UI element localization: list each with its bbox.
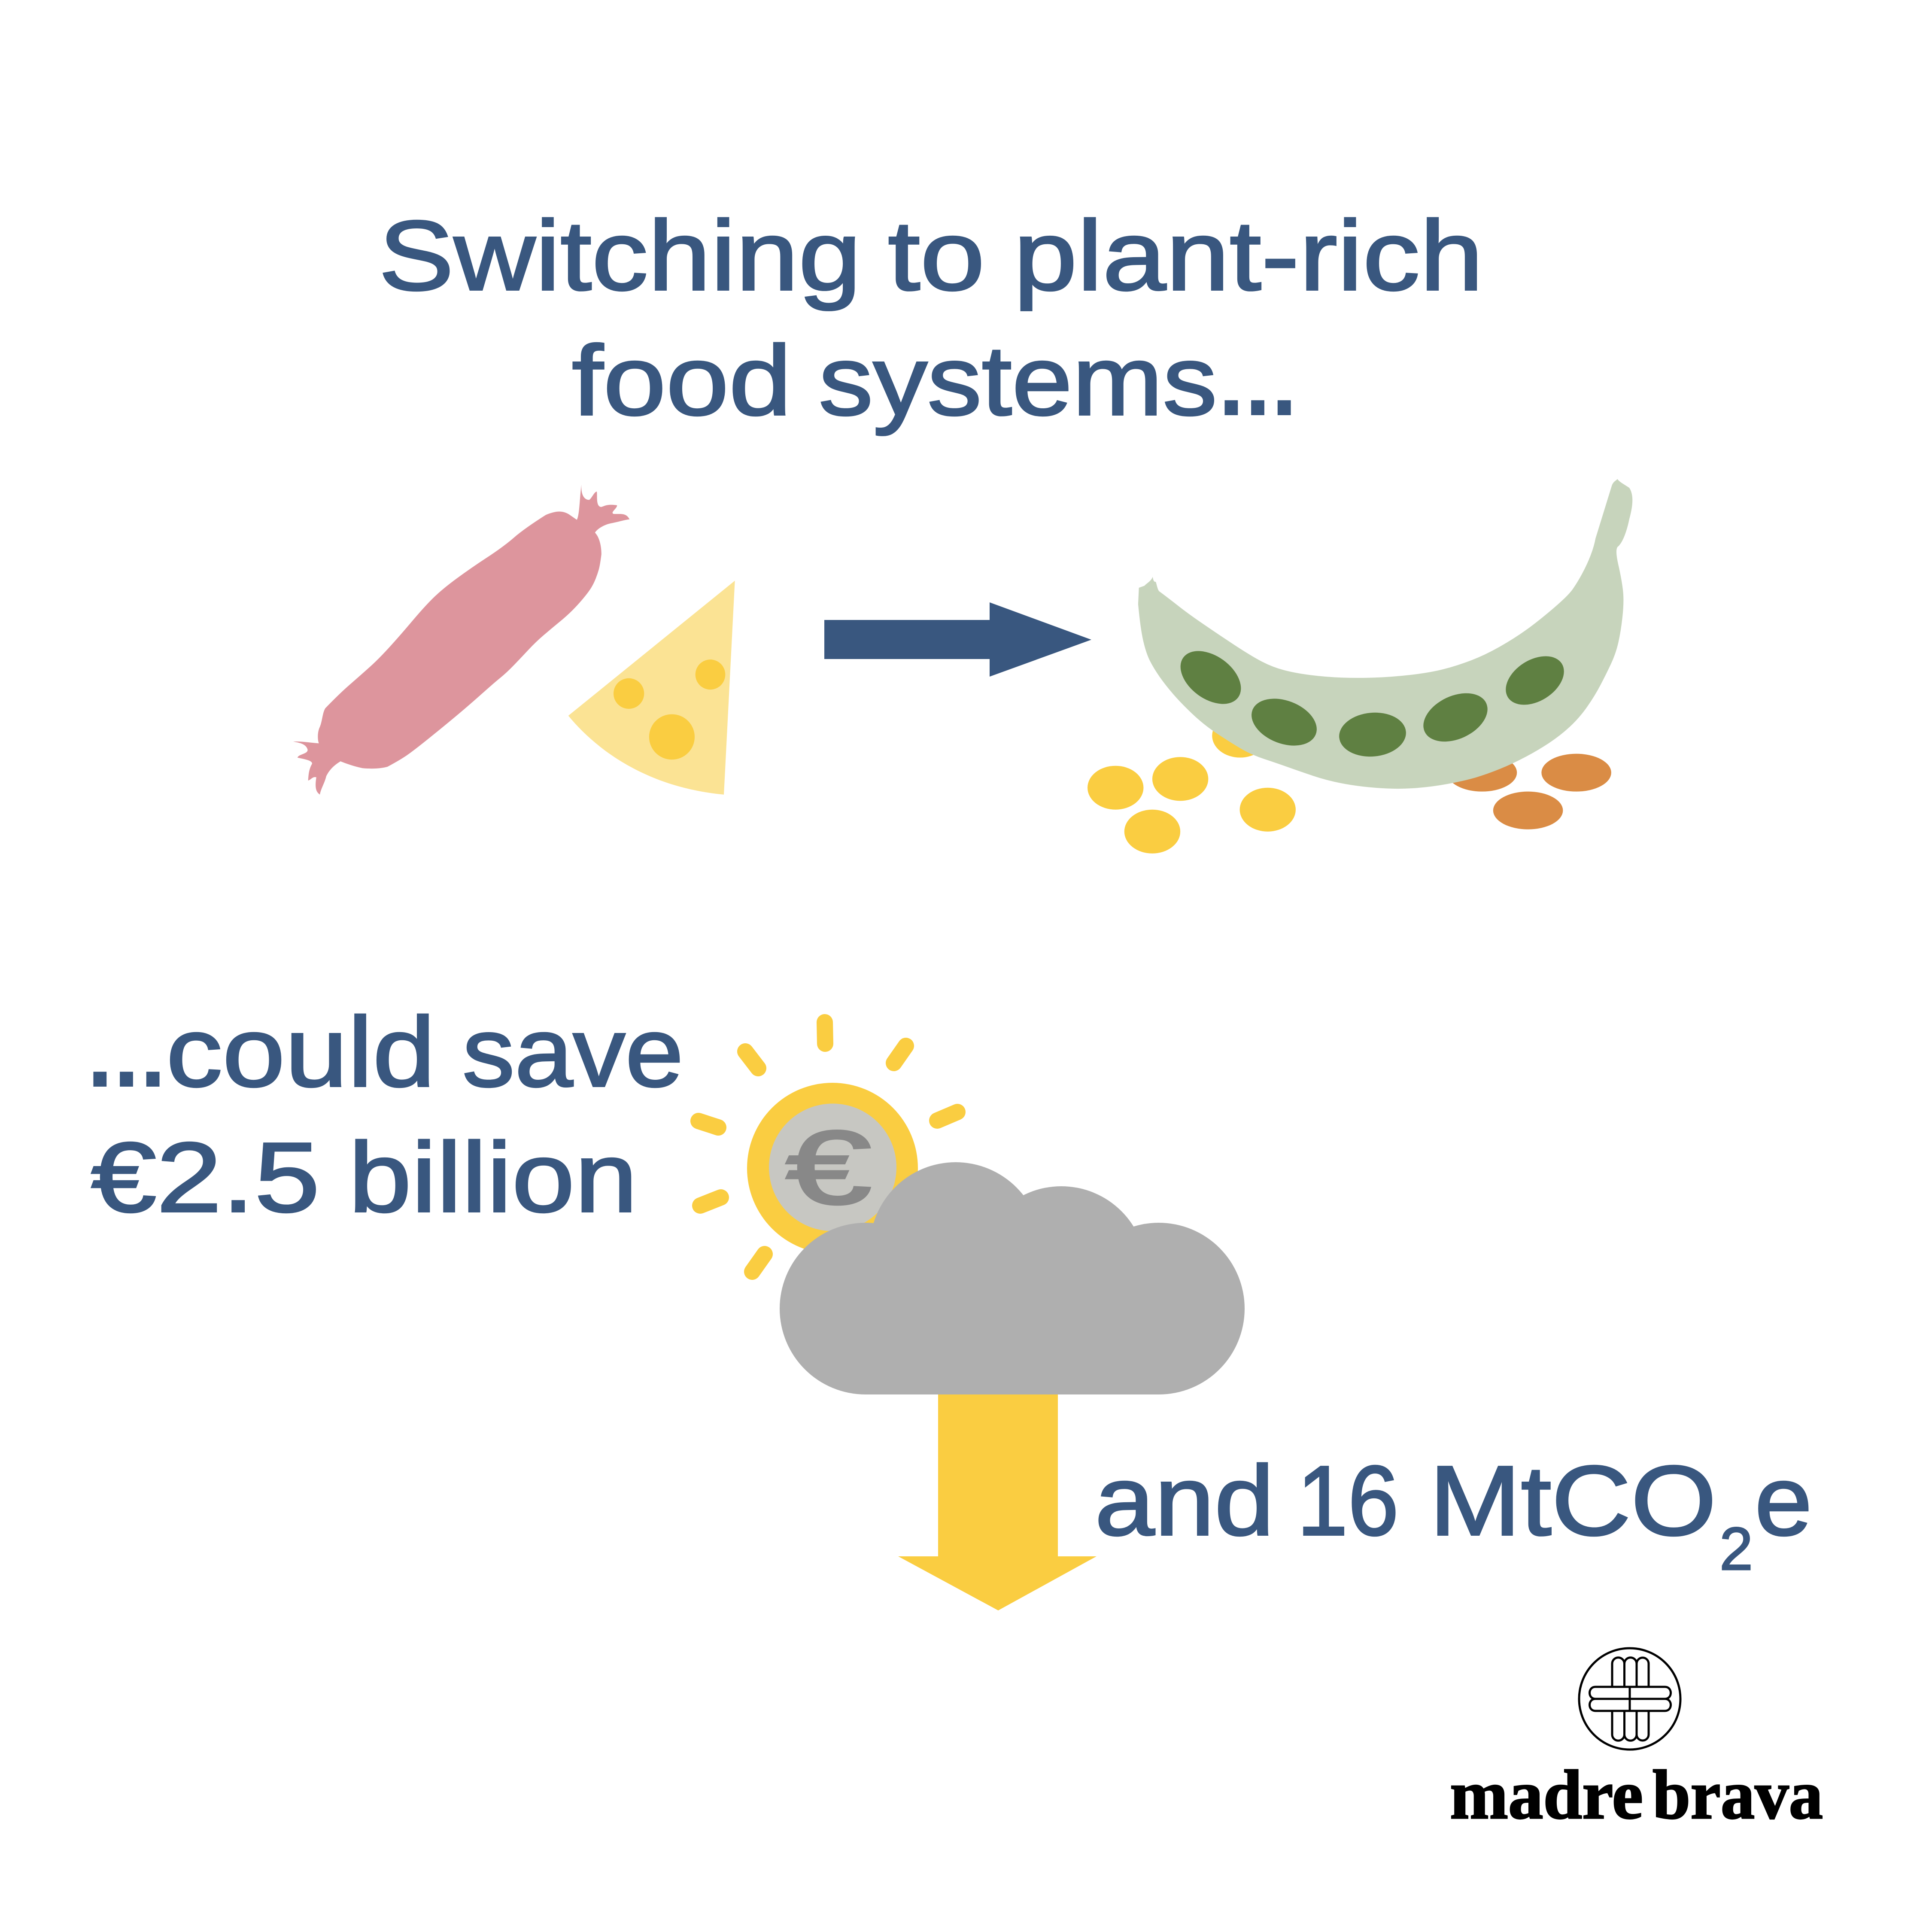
logo wordmark: brava [1653,1756,1823,1834]
title: to [888,200,985,311]
text: and 16 MtCO2e [1095,1445,1812,1583]
logo: madre brava [1450,1648,1823,1834]
title [379,200,1483,436]
title: Switching [379,200,861,311]
icon: downward arrow [898,1374,1097,1610]
arrow: from animal products to plants [824,602,1091,677]
icon: open pea pod [1138,479,1632,789]
icon: shining euro coin [699,1022,957,1272]
icon: grey emissions cloud [780,1162,1245,1394]
title: plant-rich [1014,200,1483,311]
icon: yellow and orange beans [1088,714,1611,854]
text: and 16 MtCO2e: 2 [1719,1515,1753,1583]
text: could save 2.5 billion euros [87,995,683,1233]
text: could save 2.5 billion euros: ... [87,995,166,1106]
logo emblem [1579,1648,1680,1750]
text: could save 2.5 billion euros: billion [349,1122,638,1233]
text: and 16 MtCO2e: e [1755,1445,1812,1556]
logo wordmark [1450,1756,1823,1834]
icon: cheese wedge [568,580,735,795]
icon: sausage [293,485,629,795]
logo wordmark: madre [1450,1756,1643,1834]
title: food [572,325,792,436]
text: and 16 MtCO2e: and [1095,1445,1274,1556]
text: and 16 MtCO2e: MtCO [1429,1445,1716,1556]
text: could save 2.5 billion euros: €2.5 [91,1122,320,1233]
text: could save 2.5 billion euros: could [166,996,435,1107]
title: ... [1218,323,1297,434]
title: systems [819,325,1217,436]
icon: shining euro coin: € [786,1110,871,1226]
text: could save 2.5 billion euros: save [462,996,683,1107]
text: and 16 MtCO2e: 16 [1297,1445,1399,1556]
